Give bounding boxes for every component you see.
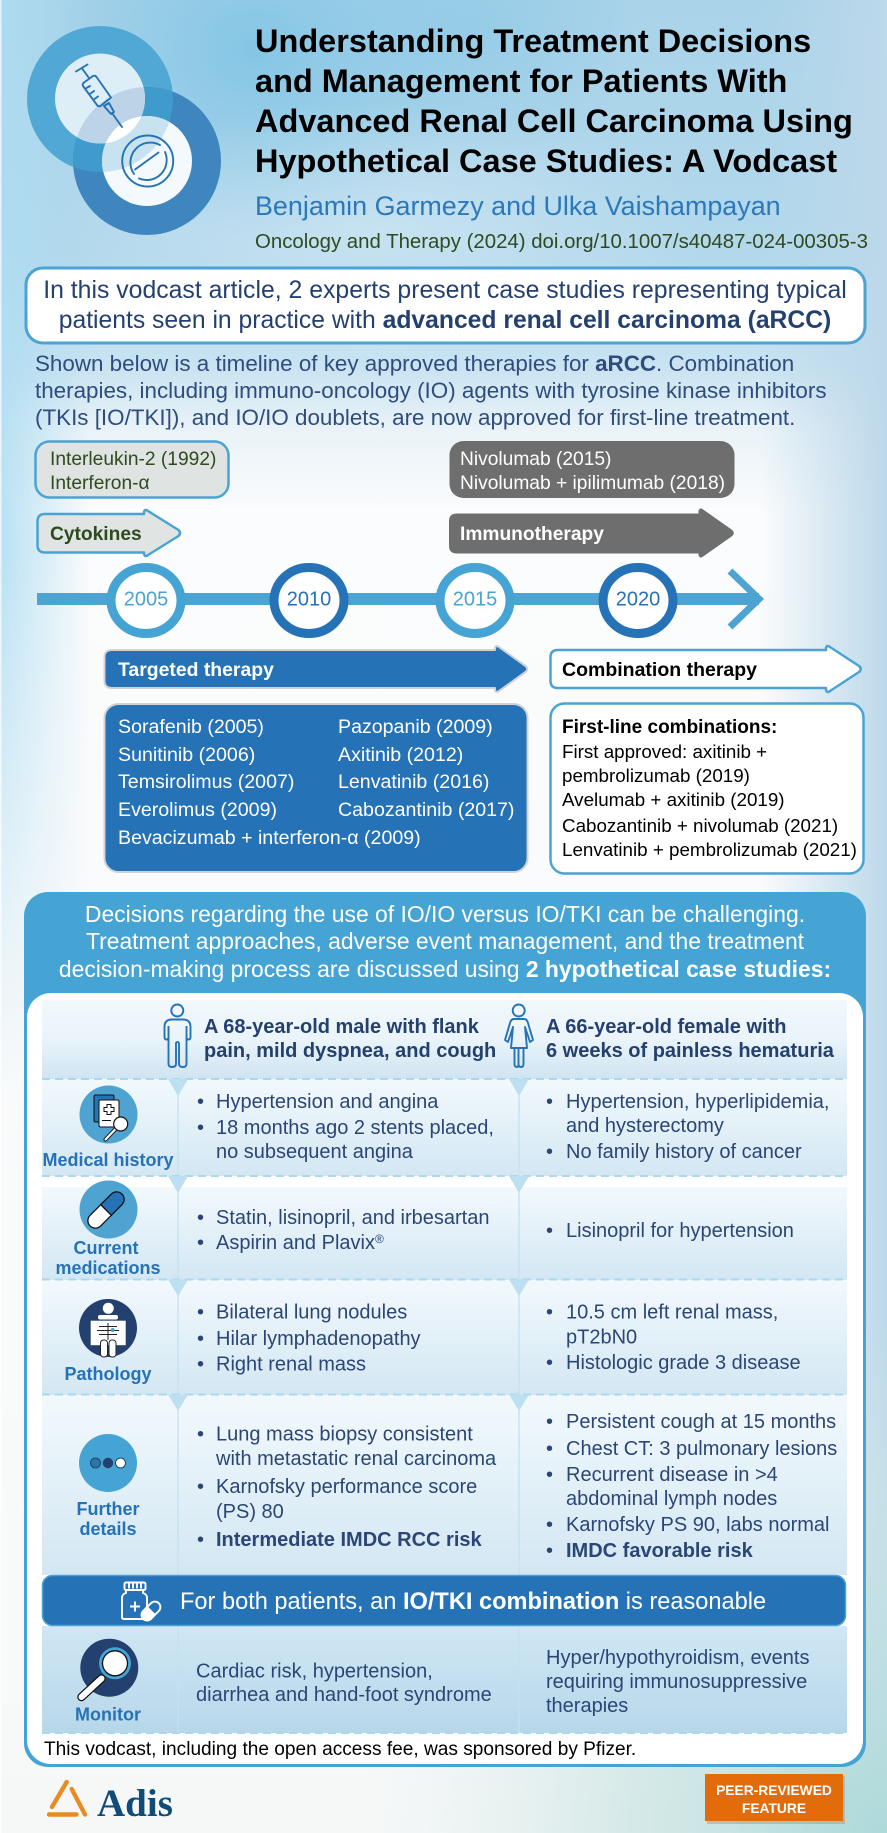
row: further details: Lung mass biopsy consistent — [216, 1424, 473, 1446]
authors: Benjamin Garmezy and Ulka Vaishampayan — [255, 191, 781, 221]
row: medical history: • — [197, 1091, 204, 1113]
row: monitor — [75, 1639, 809, 1724]
row: monitor: Cardiac risk, hypertension, — [196, 1660, 433, 1682]
patient 2 header: A 66-year-old female with — [546, 1016, 786, 1038]
immunotherapy agents box: Nivolumab + ipilimumab (2018) — [460, 473, 725, 494]
row: current medications: • — [197, 1207, 204, 1229]
row: further details: Intermediate IMDC RCC risk — [216, 1529, 482, 1551]
title: Advanced Renal Cell Carcinoma Using — [255, 103, 853, 139]
row: monitor: diarrhea and hand-foot syndrome — [196, 1684, 492, 1706]
icon: pill — [122, 136, 173, 186]
year marker 2015: 2015 — [453, 588, 497, 610]
row: further details: • — [546, 1411, 553, 1433]
icon: x-ray viewer — [79, 1299, 137, 1357]
row: current medications: Lisinopril for hypertension — [566, 1220, 794, 1242]
panel: targeted therapy agents: Axitinib (2012) — [338, 744, 463, 766]
peer-reviewed badge: PEER-REVIEWED — [716, 1783, 832, 1798]
row: current medications: • — [197, 1232, 204, 1254]
table row backgrounds — [42, 1000, 847, 1733]
row: pathology: 10.5 cm left renal mass, — [566, 1302, 778, 1324]
row: current medications: Current — [73, 1238, 139, 1258]
timeline introduction paragraph: (TKIs [IO/TKI]), and IO/IO doublets, are now approved for first-line treatment. — [35, 405, 795, 430]
patient 1 header: A 68-year-old male with flank — [204, 1016, 480, 1038]
icon: capsule — [80, 1180, 138, 1238]
panel: targeted therapy agents — [104, 704, 528, 872]
row: current medications: ® — [375, 1232, 384, 1246]
timeline introduction paragraph — [35, 351, 827, 430]
row: monitor: requiring immunosuppressive — [546, 1671, 807, 1693]
year marker 2010: 2010 — [287, 588, 331, 610]
intro callout box: patients seen in practice with advanced renal cell carcinoma (aRCC) — [59, 307, 831, 334]
row: further details: abdominal lymph nodes — [566, 1488, 777, 1510]
panel: first-line combinations: pembrolizumab (2019) — [562, 765, 750, 786]
immunotherapy agents box — [450, 441, 734, 498]
row: current medications: Statin, lisinopril, and irbesartan — [216, 1207, 489, 1229]
recommendation banner — [42, 1576, 846, 1626]
panel: targeted therapy agents: Cabozantinib (2017) — [338, 799, 514, 821]
case study introduction — [59, 901, 831, 982]
icon: medical record — [80, 1086, 138, 1144]
row: further details: • — [546, 1438, 553, 1460]
panel: targeted therapy agents: Sunitinib (2006) — [118, 744, 255, 766]
title: and Management for Patients With — [255, 63, 787, 99]
year marker 2015 — [440, 568, 510, 634]
row: further details: • — [197, 1529, 204, 1551]
arrow: combination therapy — [550, 646, 861, 692]
year marker 2010 — [274, 568, 344, 634]
icon: three dots — [79, 1434, 137, 1492]
row: further details: • — [197, 1476, 204, 1498]
icon: male patient — [164, 1004, 190, 1067]
timeline introduction paragraph: therapies, including immuno-oncology (IO) agents with tyrosine kinase inhibitors — [35, 378, 827, 403]
row: further details: Karnofsky performance score — [216, 1476, 477, 1498]
row: current medications: Aspirin and Plavix — [216, 1232, 375, 1254]
row: further details: • — [546, 1514, 553, 1536]
icon: medicine bottle and pill — [122, 1582, 163, 1623]
row: further details — [76, 1411, 837, 1562]
arrow: immunotherapy — [450, 509, 733, 557]
icon: syringe — [76, 64, 122, 127]
patient 1 header — [164, 1004, 496, 1067]
sponsorship note: This vodcast, including the open access fee, was sponsored by Pfizer. — [44, 1739, 636, 1760]
arrow: cytokines: Cytokines — [50, 524, 142, 545]
row: monitor: therapies — [546, 1695, 628, 1717]
icon: female patient — [505, 1004, 533, 1067]
row: monitor: Monitor — [75, 1704, 141, 1724]
row: further details: details — [79, 1519, 137, 1539]
immunotherapy agents box: Nivolumab (2015) — [460, 449, 611, 470]
row: medical history: Hypertension and angina — [216, 1091, 439, 1113]
row: medical history: • — [546, 1091, 553, 1113]
row: pathology: Right renal mass — [216, 1354, 366, 1376]
arrow: targeted therapy: Targeted therapy — [118, 659, 274, 681]
row: medical history: Hypertension, hyperlipidemia, — [566, 1091, 829, 1113]
row: further details: Recurrent disease in >4 — [566, 1464, 778, 1486]
cytokine agents box — [36, 442, 228, 498]
row: pathology: • — [197, 1328, 204, 1350]
row: medical history: no subsequent angina — [216, 1141, 414, 1163]
row: current medications: • — [546, 1220, 553, 1242]
arrow: targeted therapy — [104, 646, 527, 692]
recommendation banner: For both patients, an IO/TKI combination is reasonable — [180, 1589, 766, 1615]
panel: first-line combinations: Avelumab + axitinib (2019) — [562, 789, 785, 810]
timeline axis with arrowhead — [37, 571, 759, 627]
timeline introduction paragraph: Shown below is a timeline of key approved therapies for aRCC. Combination — [35, 351, 794, 376]
arrow: combination therapy: Combination therapy — [562, 659, 757, 681]
arrow: immunotherapy: Immunotherapy — [460, 524, 604, 545]
row: further details: • — [546, 1464, 553, 1486]
year marker 2020 — [603, 568, 673, 634]
row: further details: Chest CT: 3 pulmonary lesions — [566, 1438, 837, 1460]
patient 2 header: 6 weeks of painless hematuria — [546, 1040, 835, 1062]
row: current medications — [55, 1180, 794, 1278]
peer-reviewed badge: FEATURE — [742, 1801, 806, 1816]
title: Understanding Treatment Decisions — [255, 23, 811, 59]
row: pathology: Pathology — [64, 1364, 152, 1384]
Adis logo: Adis — [97, 1782, 173, 1825]
title — [255, 23, 853, 179]
row: pathology — [64, 1299, 801, 1384]
row: further details: Further — [76, 1499, 140, 1519]
panel: targeted therapy agents: Bevacizumab + interferon-α (2009) — [118, 827, 421, 849]
intro callout box — [26, 268, 865, 343]
cytokine agents box: Interferon-α — [50, 473, 150, 494]
row: medical history — [42, 1086, 829, 1170]
row: medical history: Medical history — [42, 1150, 174, 1170]
intro callout box: In this vodcast article, 2 experts present case studies representing typical — [43, 277, 847, 304]
row: further details: Persistent cough at 15 months — [566, 1411, 836, 1433]
icon: magnifying glass — [80, 1639, 138, 1697]
year marker 2005 — [111, 568, 181, 634]
row: pathology: Hilar lymphadenopathy — [216, 1328, 421, 1350]
panel: first-line combinations: Lenvatinib + pembrolizumab (2021) — [562, 839, 857, 860]
patient 1 header: pain, mild dyspnea, and cough — [204, 1040, 496, 1062]
row: pathology: pT2bN0 — [566, 1326, 637, 1348]
panel: case study container — [24, 892, 866, 1767]
row: pathology: • — [546, 1302, 553, 1324]
panel: targeted therapy agents: Lenvatinib (2016) — [338, 771, 489, 793]
title: Hypothetical Case Studies: A Vodcast — [255, 143, 837, 179]
panel: targeted therapy agents: Everolimus (2009) — [118, 799, 277, 821]
row: pathology: Histologic grade 3 disease — [566, 1352, 801, 1374]
peer-reviewed badge — [705, 1774, 845, 1824]
header logo: overlapping syringe and pill circles — [27, 26, 221, 235]
case study introduction: Decisions regarding the use of IO/IO versus IO/TKI can be challenging. — [85, 901, 805, 927]
Adis logo — [49, 1782, 173, 1825]
arrow: cytokines — [38, 510, 180, 556]
row: current medications: medications — [55, 1258, 161, 1278]
journal citation: Oncology and Therapy (2024) doi.org/10.1007/s40487-024-00305-3 — [255, 231, 868, 253]
row: further details: Karnofsky PS 90, labs normal — [566, 1514, 829, 1536]
row: further details: (PS) 80 — [216, 1501, 284, 1523]
row: medical history: • — [197, 1117, 204, 1139]
row: medical history: and hysterectomy — [566, 1115, 724, 1137]
row: monitor: Hyper/hypothyroidism, events — [546, 1647, 809, 1669]
panel: targeted therapy agents: Sorafenib (2005) — [118, 716, 264, 738]
row: medical history: 18 months ago 2 stents placed, — [216, 1117, 494, 1139]
panel: targeted therapy agents: Temsirolimus (2007) — [118, 771, 294, 793]
panel: first-line combinations: Cabozantinib + nivolumab (2021) — [562, 815, 838, 836]
row: further details: with metastatic renal carcinoma — [215, 1448, 497, 1470]
row: pathology: • — [197, 1354, 204, 1376]
row: pathology: • — [197, 1302, 204, 1324]
row: further details: • — [197, 1424, 204, 1446]
row: medical history: No family history of cancer — [566, 1141, 802, 1163]
row: further details: IMDC favorable risk — [566, 1540, 754, 1562]
patient 2 header — [505, 1004, 835, 1067]
row: pathology: Bilateral lung nodules — [216, 1302, 407, 1324]
cytokine agents box: Interleukin-2 (1992) — [50, 449, 216, 470]
row: medical history: • — [546, 1141, 553, 1163]
panel: targeted therapy agents: Pazopanib (2009) — [338, 716, 493, 738]
panel: first-line combinations: First-line combinations: — [562, 717, 777, 738]
year marker 2005: 2005 — [124, 588, 168, 610]
case study introduction: decision-making process are discussed using 2 hypothetical case studies: — [59, 956, 831, 982]
row: further details: • — [546, 1540, 553, 1562]
year marker 2020: 2020 — [616, 588, 660, 610]
panel: first-line combinations — [550, 704, 864, 874]
panel: first-line combinations: First approved: axitinib + — [562, 741, 767, 762]
case study introduction: Treatment approaches, adverse event management, and the treatment — [86, 928, 805, 954]
row: pathology: • — [546, 1352, 553, 1374]
